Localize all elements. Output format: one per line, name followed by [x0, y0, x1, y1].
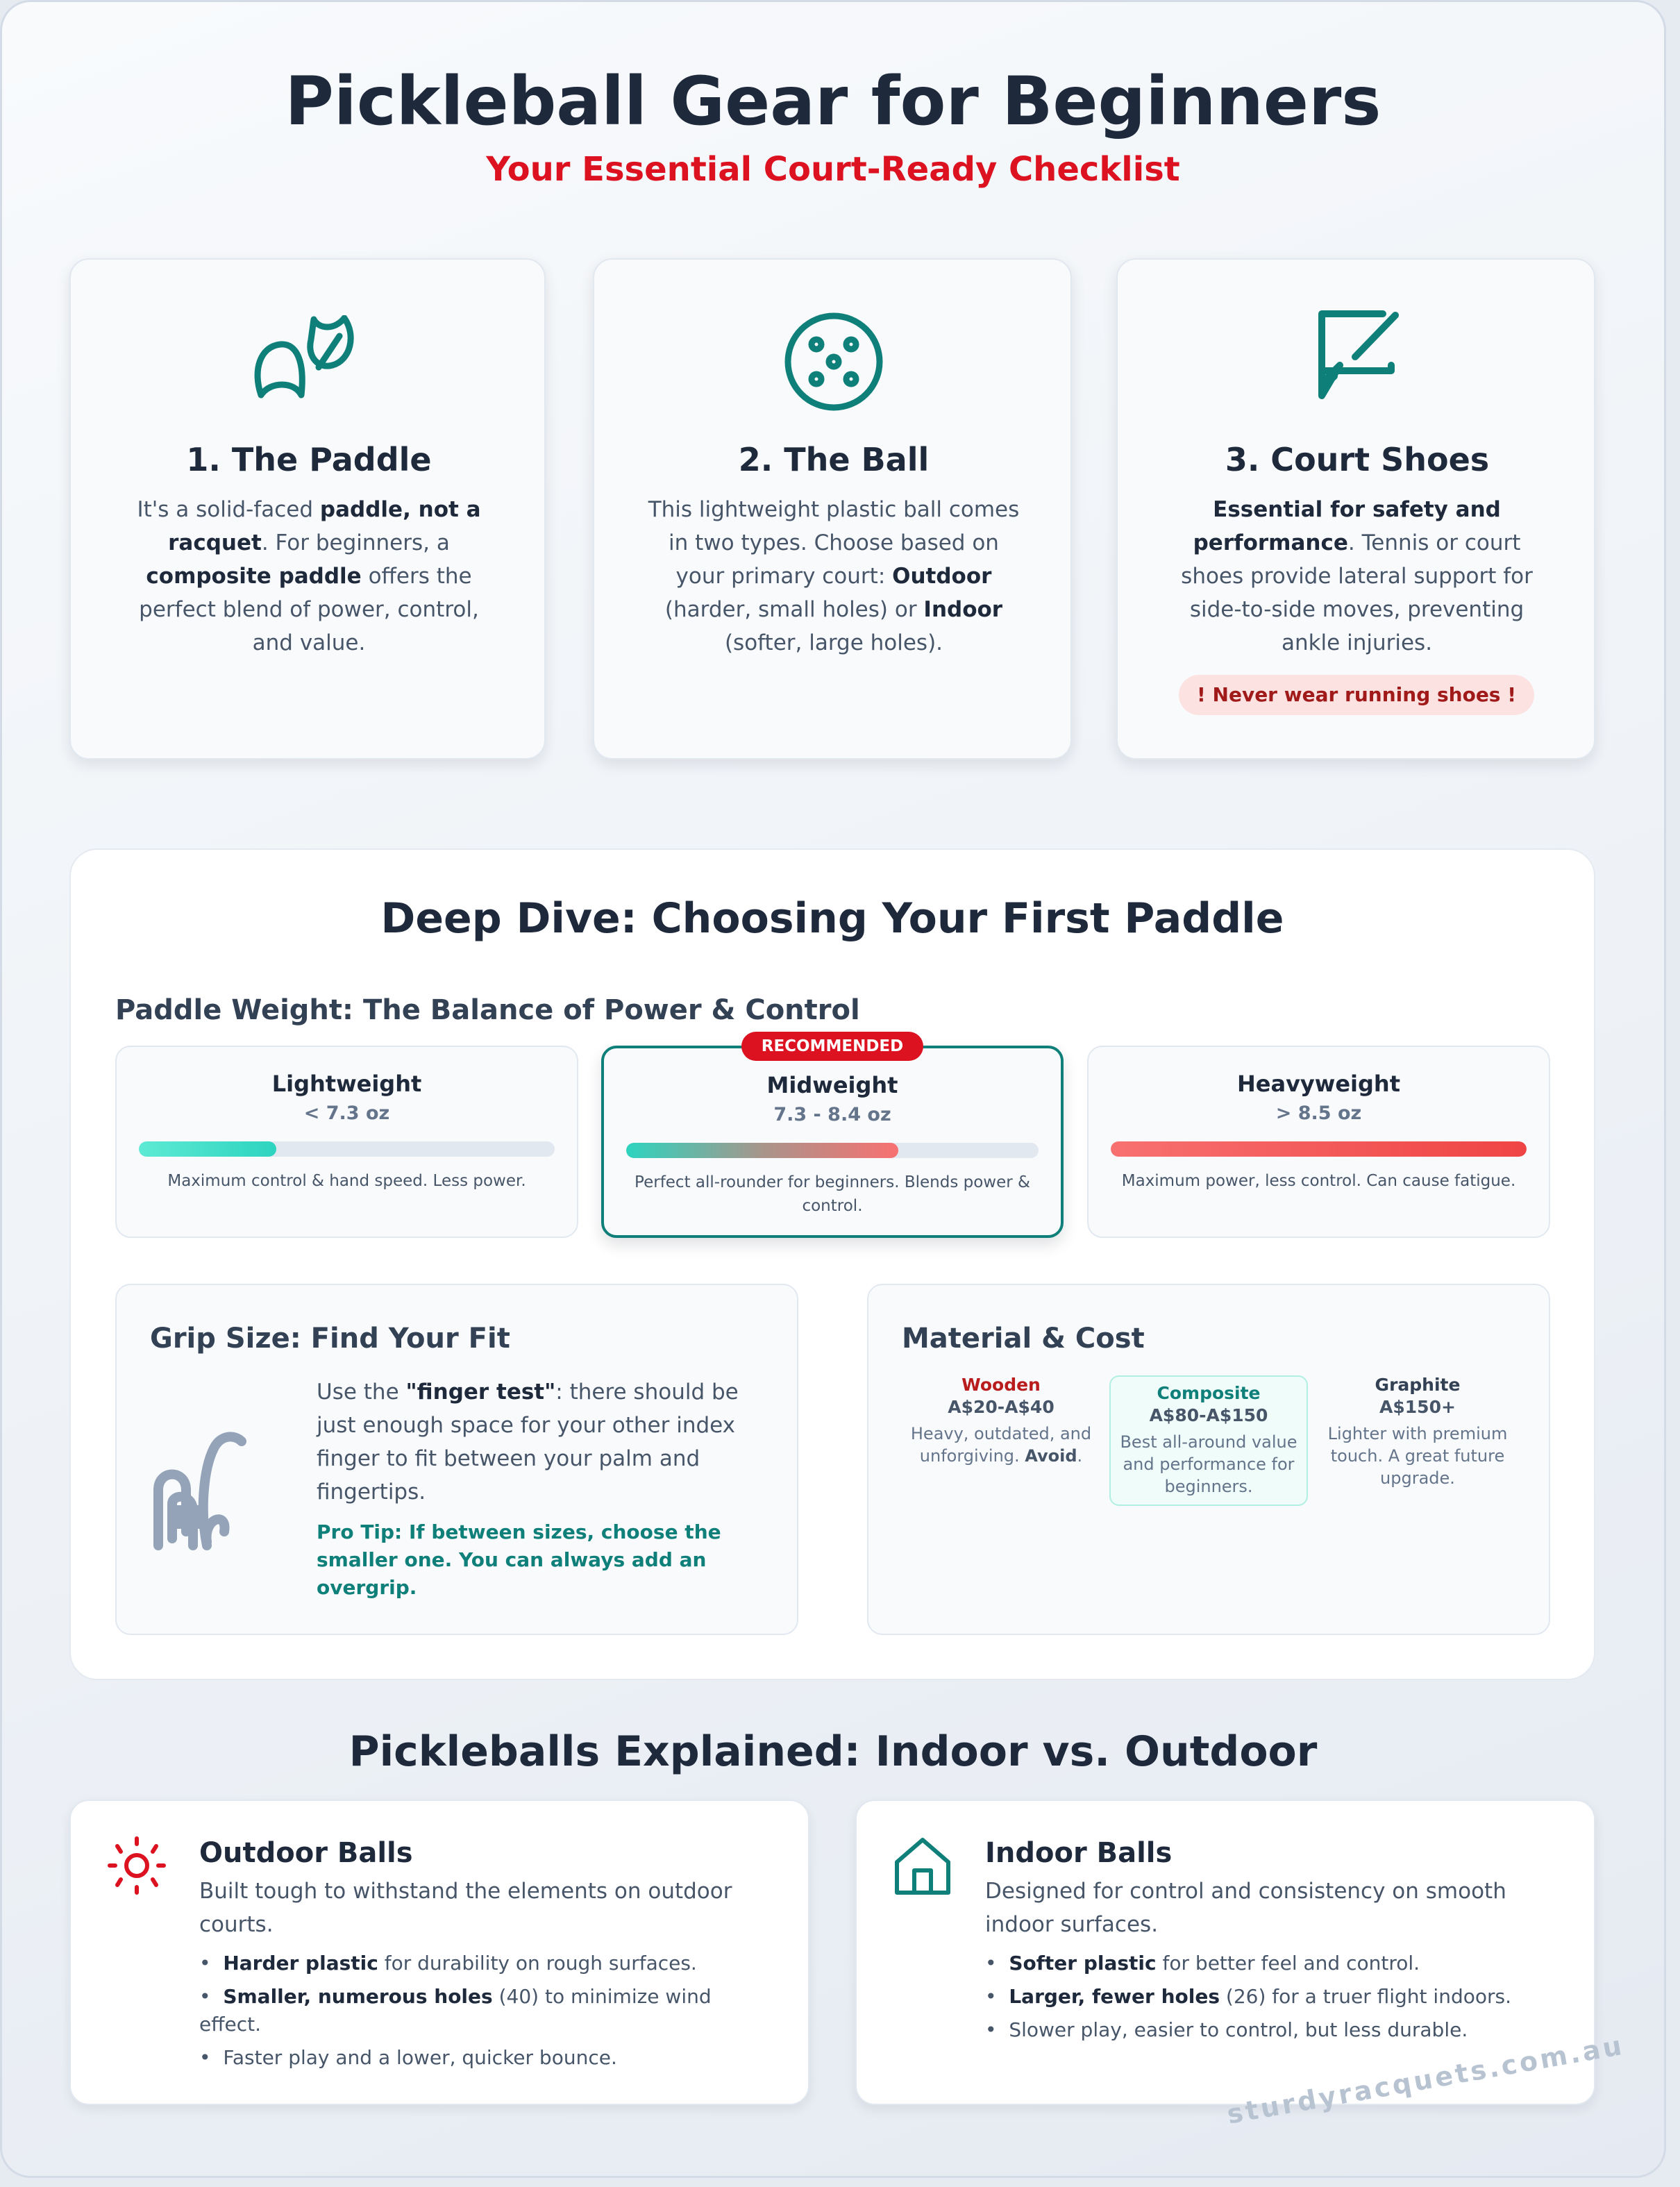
list: outdoor features: • Smaller, numerous holes (40) to minimize wind effect. — [199, 1985, 712, 2036]
badge: recommended: RECOMMENDED — [762, 1037, 903, 1055]
icon: paddle — [254, 315, 354, 399]
panel: grip size — [115, 1284, 798, 1635]
column: wooden — [911, 1375, 1091, 1466]
icon: shoe — [1318, 310, 1399, 399]
list: outdoor features: • Faster play and a lower, quicker bounce. — [199, 2046, 617, 2069]
text: outdoor description: Built tough to withstand the elements on outdoor courts. — [199, 1879, 732, 1937]
panel: indoor balls — [855, 1800, 1595, 2105]
subtitle: Your Essential Court-Ready Checklist — [486, 150, 1180, 189]
column: wooden: Heavy, outdated, and unforgiving. Avoid. — [911, 1424, 1091, 1466]
heading: grip size: Grip Size: Find Your Fit — [150, 1323, 510, 1355]
panel: deep dive — [69, 848, 1595, 1680]
column: graphite: A$150+ — [1379, 1397, 1456, 1417]
text: pro tip: Pro Tip: If between sizes, choose the smaller one. You can always add an overgrip. — [317, 1520, 721, 1599]
list: outdoor features: • Harder plastic for durability on rough surfaces. — [199, 1952, 697, 1975]
text: paddle description: It's a solid-faced paddle, not a racquet. For beginners, a composite paddle offers the perfect blend of power, control, and value. — [137, 497, 481, 655]
heading: paddle weight: Paddle Weight: The Balance of Power & Control — [115, 994, 860, 1026]
heading: material & cost: Material & Cost — [902, 1323, 1145, 1355]
panel: heavyweight: Maximum power, less control. Can cause fatigue. — [1122, 1172, 1515, 1190]
list: indoor features: • Larger, fewer holes (26) for a truer flight indoors. — [985, 1985, 1511, 2008]
callout: warning pill: ! Never wear running shoes ! — [1197, 683, 1516, 706]
panel: heavyweight — [1087, 1046, 1550, 1238]
heading: pickleballs explained: Pickleballs Explained: Indoor vs. Outdoor — [349, 1727, 1317, 1776]
icon: hand grip — [153, 1432, 246, 1550]
column: composite: Composite — [1157, 1383, 1261, 1403]
panel: midweight: 7.3 - 8.4 oz — [773, 1104, 891, 1125]
panel: heavyweight: > 8.5 oz — [1276, 1103, 1361, 1124]
column: graphite: Graphite — [1375, 1375, 1460, 1395]
column: graphite — [1328, 1375, 1507, 1488]
heading: deep dive: Deep Dive: Choosing Your First Paddle — [381, 894, 1284, 943]
panel: ball card — [593, 258, 1072, 760]
column: wooden: A$20-A$40 — [948, 1397, 1055, 1417]
panel: heavyweight: Heavyweight — [1237, 1071, 1400, 1097]
panel: paddle card — [69, 258, 546, 760]
panel: midweight — [601, 1046, 1064, 1238]
list: outdoor features — [199, 1952, 712, 2069]
panel: outdoor balls — [69, 1800, 809, 2105]
badge: recommended — [741, 1032, 923, 1061]
column: graphite: Lighter with premium touch. A great future upgrade. — [1328, 1424, 1507, 1488]
panel: shoes card — [1116, 258, 1595, 760]
panel: lightweight: < 7.3 oz — [304, 1103, 389, 1124]
list: indoor features: • Slower play, easier to control, but less durable. — [985, 2018, 1468, 2041]
icon: sun — [108, 1836, 166, 1895]
text: ball description: This lightweight plastic ball comes in two types. Choose based on your primary court: Outdoor (harder, small holes) or Indoor (softer, large holes). — [648, 497, 1019, 655]
column: composite: Best all-around value and performance for beginners. — [1120, 1432, 1297, 1496]
bar: lightweight — [139, 1141, 555, 1157]
title: Pickleball Gear for Beginners — [285, 62, 1381, 140]
panel: material & cost — [867, 1284, 1550, 1635]
bar: heavyweight — [1111, 1141, 1527, 1157]
text: shoes description: Essential for safety and performance. Tennis or court shoes provide lateral support for side-to-side moves, preventing ankle injuries. — [1181, 497, 1533, 655]
icon: ball — [784, 312, 883, 411]
list: indoor features: • Softer plastic for better feel and control. — [985, 1952, 1420, 1975]
text: finger test: Use the "finger test": there should be just enough space for your other index finger to fit between your palm and fingertips. — [317, 1380, 739, 1505]
heading: 1. The Paddle: 1. The Paddle — [186, 441, 432, 478]
panel: midweight: Perfect all-rounder for beginners. Blends power & control. — [635, 1173, 1030, 1215]
heading: indoor balls: Indoor Balls — [985, 1837, 1172, 1869]
list: indoor features — [985, 1952, 1511, 2041]
watermark: sturdyracquets.com.au — [1225, 2030, 1627, 2130]
panel: midweight: Midweight — [767, 1072, 898, 1098]
heading: 2. The Ball: 2. The Ball — [739, 441, 929, 478]
text: indoor description: Designed for control and consistency on smooth indoor surfaces. — [985, 1879, 1506, 1937]
column: composite: A$80-A$150 — [1150, 1405, 1268, 1425]
panel: lightweight: Lightweight — [272, 1071, 421, 1097]
column: wooden: Wooden — [961, 1375, 1041, 1395]
heading: outdoor balls: Outdoor Balls — [199, 1837, 413, 1869]
panel: lightweight — [115, 1046, 578, 1238]
column: composite — [1109, 1375, 1308, 1506]
heading: 3. Court Shoes: 3. Court Shoes — [1225, 441, 1489, 478]
callout: warning pill — [1179, 675, 1534, 715]
panel: lightweight: Maximum control & hand speed. Less power. — [167, 1172, 526, 1190]
bar: midweight — [626, 1143, 1039, 1158]
icon: house — [895, 1837, 950, 1895]
